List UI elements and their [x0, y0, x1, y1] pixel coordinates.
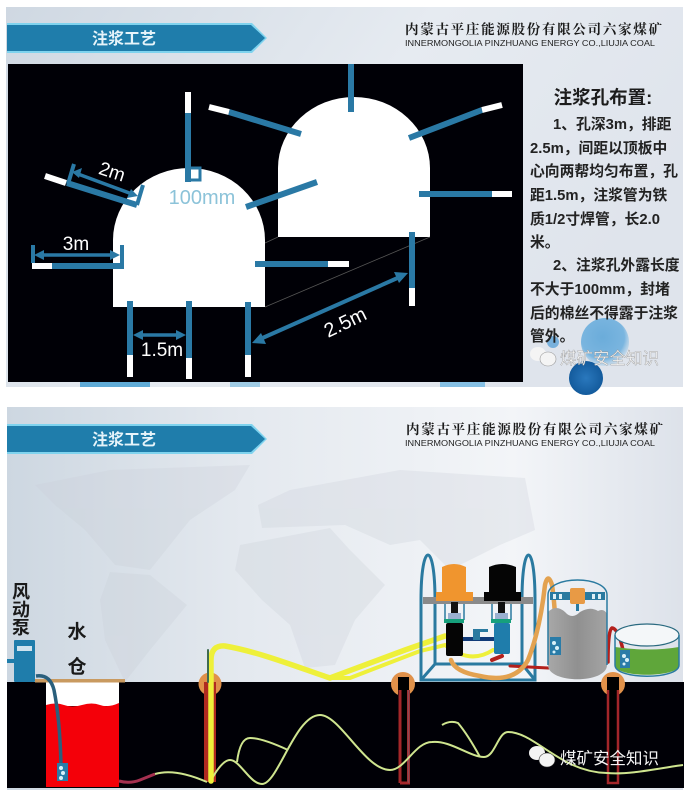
label: air pump: 风	[12, 582, 30, 602]
text block: hole layout description: 心向两帮均匀布置，孔	[530, 162, 678, 180]
dimension: 2m	[68, 158, 143, 205]
text block: hole layout description: 米。	[530, 234, 560, 251]
dimension: 2m: 2m	[96, 158, 128, 187]
grouting pump frame and machine	[421, 555, 535, 680]
panel: hole layout	[6, 7, 683, 395]
text block: hole layout description: 2、注浆孔外露长度	[553, 256, 680, 274]
text block: hole layout description: 管外。	[530, 327, 574, 345]
company name: 内蒙古平庄能源股份有限公司六家煤矿	[406, 418, 664, 438]
tunnel outlines and perspective lines	[113, 97, 430, 307]
watermark bottom: 煤矿安全知识	[560, 749, 659, 768]
panel: grouting process	[7, 407, 684, 790]
dimension: 100mm	[169, 168, 235, 209]
ground	[7, 682, 684, 788]
company name: INNERMONGOLIA PINZHUANG ENERGY CO.,LIUJIA COAL	[405, 38, 655, 48]
label: water sump	[67, 621, 87, 678]
black diagram background	[8, 64, 523, 382]
header banner	[7, 424, 267, 454]
dimension: 3m	[33, 234, 122, 268]
orange and red hoses	[451, 578, 623, 678]
text block: hole layout description: 不大于100mm，封堵	[530, 280, 670, 298]
text block: hole layout description	[530, 87, 680, 345]
watermark top	[530, 347, 659, 368]
header banner: 注浆工艺	[92, 29, 156, 48]
text block: hole layout description: 后的棉丝不得露于注浆	[530, 304, 678, 322]
text block: hole layout description: 注浆孔布置:	[554, 87, 652, 108]
gray slurry tank	[548, 580, 607, 679]
header banner	[7, 23, 267, 53]
text block: hole layout description: 距1.5m，注浆管为铁	[530, 186, 668, 204]
text block: hole layout description: 2.5m，间距以顶板中	[530, 139, 667, 157]
company name: INNERMONGOLIA PINZHUANG ENERGY CO.,LIUJIA COAL	[405, 438, 655, 448]
icon: air pump	[7, 640, 35, 682]
header banner: 注浆工艺	[92, 430, 156, 449]
dimension: 2.5m	[252, 272, 408, 344]
label: air pump: 泵	[12, 618, 30, 638]
company name	[405, 18, 662, 48]
label: air pump: 动	[12, 600, 30, 620]
dimension: 1.5m: 1.5m	[141, 340, 183, 361]
text block: hole layout description: 质1/2寸焊管，长2.0	[530, 210, 660, 228]
grouting holes	[198, 672, 625, 783]
company name: 内蒙古平庄能源股份有限公司六家煤矿	[405, 18, 662, 38]
dimension: 1.5m	[133, 330, 186, 361]
yellow grout hoses	[208, 636, 493, 781]
label: water sump: 水	[67, 621, 87, 643]
label: water sump: 仓	[67, 656, 87, 678]
text block: hole layout description: 1、孔深3m，排距	[553, 115, 672, 133]
dimension: 2.5m: 2.5m	[321, 303, 370, 343]
dimension: 100mm: 100mm	[169, 187, 235, 209]
company name	[405, 418, 664, 448]
world map background	[35, 465, 535, 682]
label: air pump	[12, 582, 30, 638]
green water tank	[615, 624, 679, 676]
grouting pipes	[32, 64, 512, 379]
dimension: 3m: 3m	[63, 234, 89, 255]
decorative bubble group	[80, 318, 629, 395]
underground seepage lines	[119, 715, 683, 784]
water sump	[35, 676, 125, 787]
watermark bottom	[529, 746, 659, 768]
watermark top: 煤矿安全知识	[560, 349, 659, 368]
